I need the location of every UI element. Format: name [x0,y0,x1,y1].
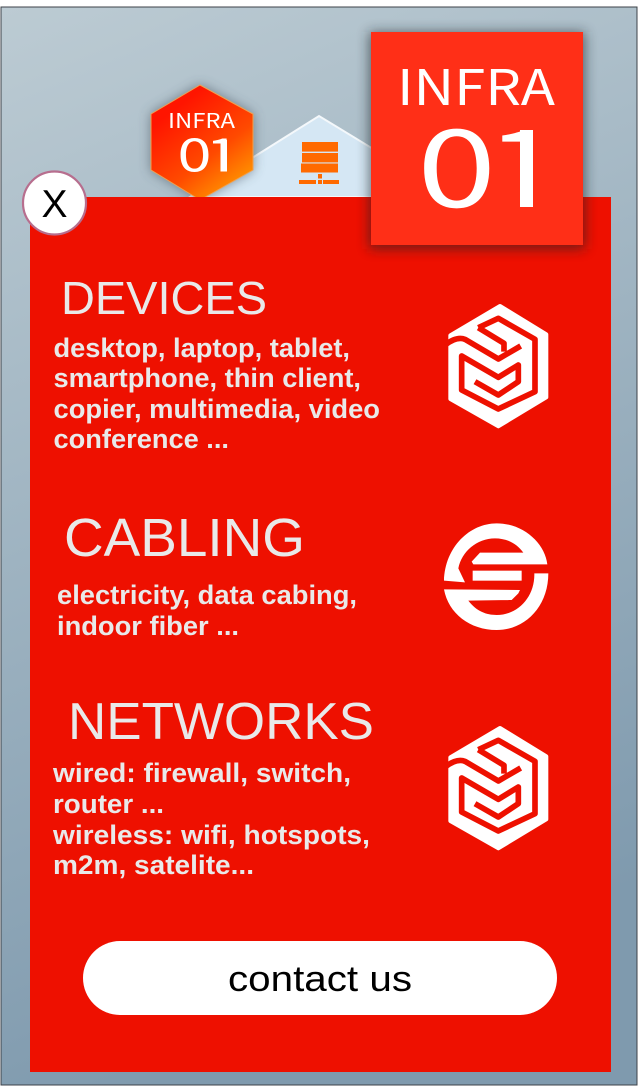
close button [23,172,86,234]
text: devices list: smartphone, thin client, [54,363,361,393]
section: networks [52,693,374,880]
hexagon badge: 01 [178,120,240,185]
INFRA 01 square badge [369,32,585,249]
text: networks list: wireless: wifi, hotspots, [52,820,370,850]
INFRA 01 square badge: 01 [417,86,564,238]
text: networks list [52,758,370,880]
text: cabling list: electricity, data cabing, [57,580,357,610]
house shape with server icon [190,116,452,197]
INFRA 01 square badge: INFRA [397,49,555,120]
section: cabling [57,508,357,641]
text: devices list [54,333,380,454]
hexagon badge [151,85,253,200]
text: devices list: copier, multimedia, video [54,394,380,424]
text: cabling list: indoor fiber ... [57,611,239,641]
heading: networks: NETWORKS [68,693,374,751]
close button: X [41,183,68,226]
hexagon badge: INFRA [168,104,236,134]
text: networks list: wired: firewall, switch, [52,758,351,788]
text: cabling list [57,580,357,641]
text: networks list: router ... [53,789,164,819]
heading: devices: DEVICES [61,272,267,324]
contact button: contact us [228,958,412,999]
contact button [83,941,557,1015]
icon: round logo cabling [444,523,548,630]
section: devices [54,272,380,454]
heading: cabling: CABLING [64,508,305,568]
red main panel [30,197,611,1072]
icon: cube logo networks [445,728,546,848]
text: devices list: desktop, laptop, tablet, [54,333,350,363]
icon: cube logo devices [445,306,546,426]
text: devices list: conference ... [54,424,229,454]
icon: server [299,142,339,184]
text: networks list: m2m, satelite... [53,850,254,880]
